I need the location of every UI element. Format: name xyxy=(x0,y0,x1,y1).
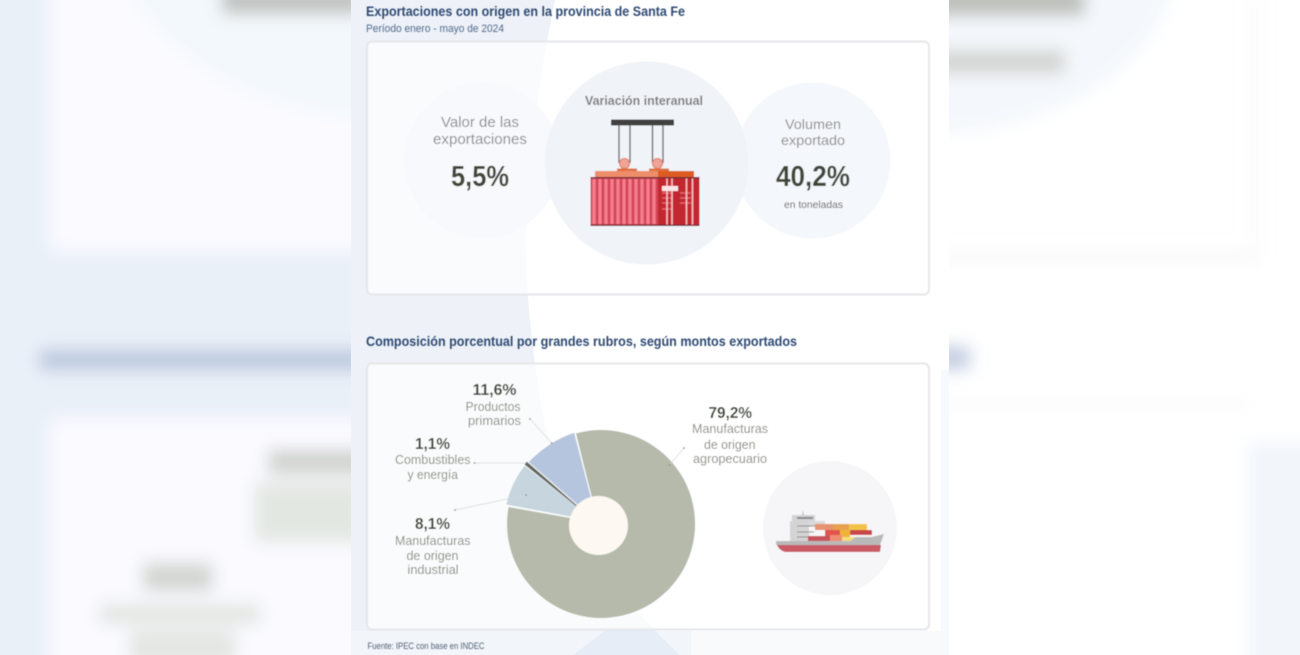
label: manufacturas de origen agropecuario: Manufacturas xyxy=(692,421,768,436)
label: combustibles y energía xyxy=(395,436,471,482)
label: manufacturas de origen industrial xyxy=(395,516,471,577)
icon: container on crane xyxy=(590,120,700,226)
circle: valor de las exportaciones: 5,5% xyxy=(451,161,509,193)
leader lines xyxy=(454,418,685,511)
label: manufacturas de origen agropecuario: agropecuario xyxy=(693,451,767,466)
circle: volumen exportado: Volumen xyxy=(785,116,841,132)
panel: composición xyxy=(367,364,929,630)
blurred background: left side xyxy=(0,0,389,655)
slice: manufacturas de origen agropecuario 79,2% xyxy=(507,430,695,618)
label: manufacturas de origen industrial: 8,1% xyxy=(415,516,450,533)
label: productos primarios: primarios xyxy=(468,413,521,428)
source note: Fuente: IPEC con base en INDEC xyxy=(368,641,485,651)
slice: combustibles y energía 1,1% xyxy=(524,462,599,523)
label: manufacturas de origen agropecuario: de origen xyxy=(704,437,756,452)
circle: volumen exportado: en toneladas xyxy=(784,199,843,211)
circle: valor de las exportaciones: Valor de las xyxy=(441,114,519,131)
chart center xyxy=(569,496,628,555)
circle: variación interanual xyxy=(545,62,748,264)
blurred background: right side xyxy=(930,0,1300,655)
circle: volumen exportado: exportado xyxy=(781,132,845,148)
label: manufacturas de origen industrial: Manufacturas xyxy=(395,533,471,548)
circle: valor de las exportaciones: exportaciones xyxy=(433,131,527,148)
circle: valor de las exportaciones xyxy=(404,82,560,238)
circle: volumen exportado xyxy=(734,82,890,238)
icon: cargo ship in circle xyxy=(763,461,897,595)
label: productos primarios: 11,6% xyxy=(472,382,516,399)
circle: variación interanual: Variación interanual xyxy=(585,94,703,108)
label: manufacturas de origen agropecuario xyxy=(692,405,768,466)
label: productos primarios xyxy=(466,382,521,428)
heading: composición porcentual: Composición porcentual por grandes rubros, según montos exportados xyxy=(366,334,797,349)
heading: exportaciones Santa Fe: Exportaciones con origen en la provincia de Santa Fe xyxy=(366,4,685,19)
label: combustibles y energía: y energía xyxy=(408,467,459,482)
center column background xyxy=(351,0,949,655)
subtitle: period: Período enero - mayo de 2024 xyxy=(366,23,504,35)
slice: manufacturas de origen industrial 8,1% xyxy=(506,465,597,522)
label: productos primarios: Productos xyxy=(466,399,521,414)
label: manufacturas de origen agropecuario: 79,2% xyxy=(708,405,752,422)
slice: productos primarios 11,6% xyxy=(528,432,598,523)
pie chart: rubros xyxy=(506,430,695,618)
label: manufacturas de origen industrial: industrial xyxy=(408,562,459,577)
label: manufacturas de origen industrial: de origen xyxy=(406,548,458,563)
label: combustibles y energía: Combustibles xyxy=(395,452,471,467)
label: combustibles y energía: 1,1% xyxy=(415,436,450,453)
circle: volumen exportado: 40,2% xyxy=(776,161,850,193)
panel: variación interanual xyxy=(367,42,929,294)
